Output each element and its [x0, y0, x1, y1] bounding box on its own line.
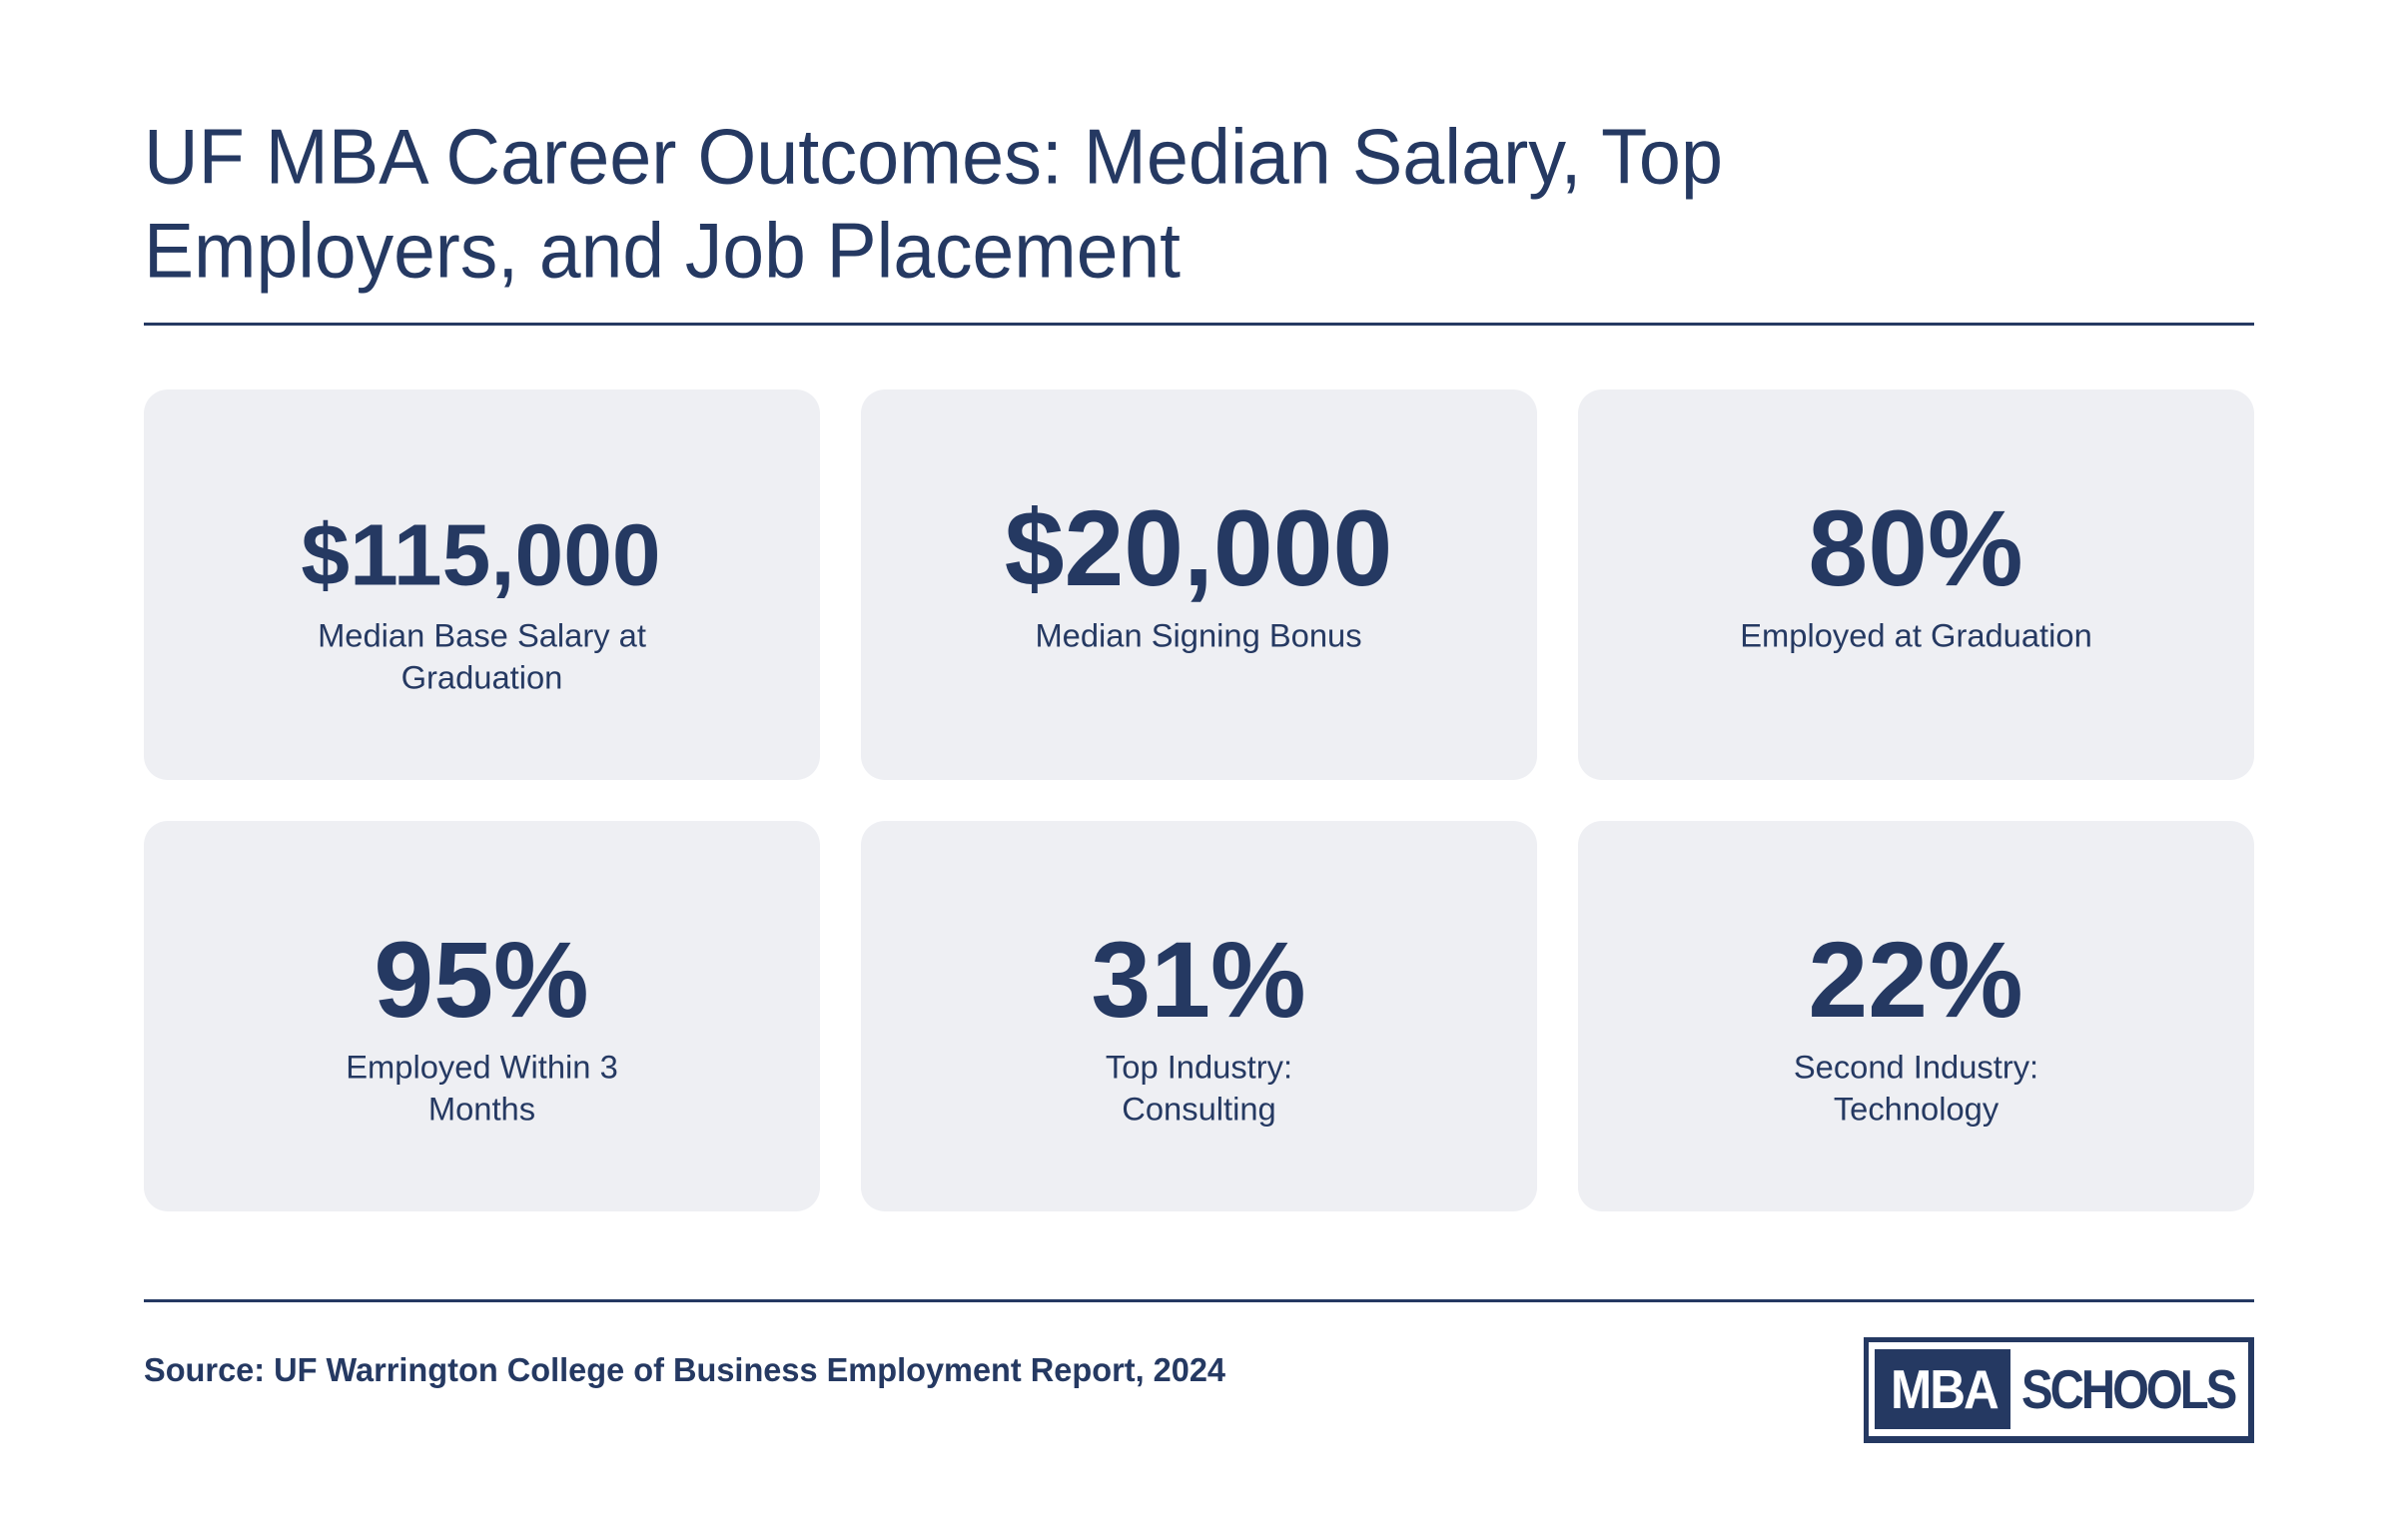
panel: top industry consulting: [861, 821, 1537, 1211]
source note: Source: UF Warrington College of Business Employment Report, 2024: [144, 1351, 1226, 1388]
panel: employed at graduation: Employed at Graduation: [1740, 617, 2092, 653]
logo: MBA Schools: MBA: [1891, 1360, 1998, 1421]
panel: employed within 3 months: Months: [428, 1091, 535, 1127]
panel: median base salary: Median Base Salary at: [318, 617, 646, 653]
panel: second industry technology: Second Industry:: [1794, 1049, 2038, 1085]
title: [144, 112, 1723, 294]
panel: median base salary: Graduation: [401, 659, 562, 695]
panel: top industry consulting: Consulting: [1122, 1091, 1276, 1127]
panel: median signing bonus: [861, 389, 1537, 780]
panel: median signing bonus: $20,000: [1005, 488, 1392, 608]
panel: employed within 3 months: Employed Within 3: [346, 1049, 618, 1085]
title: Employers, and Job Placement: [144, 206, 1181, 294]
panel: median base salary: [144, 389, 820, 780]
panel: employed within 3 months: [144, 821, 820, 1211]
panel: top industry consulting: Top Industry:: [1106, 1049, 1292, 1085]
panel: employed at graduation: 80%: [1808, 488, 2023, 608]
panel: second industry technology: Technology: [1834, 1091, 1999, 1127]
panel: top industry consulting: 31%: [1091, 920, 1306, 1040]
panel: employed at graduation: [1578, 389, 2254, 780]
panel: employed within 3 months: 95%: [374, 920, 589, 1040]
panel: median signing bonus: Median Signing Bonus: [1035, 617, 1362, 653]
title: UF MBA Career Outcomes: Median Salary, Top: [144, 112, 1723, 200]
panel: second industry technology: 22%: [1808, 920, 2023, 1040]
logo: MBA Schools: [1864, 1337, 2254, 1443]
logo: MBA Schools: SCHOOLS: [2021, 1359, 2236, 1420]
panel: second industry technology: [1578, 821, 2254, 1211]
panel: median base salary: $115,000: [301, 505, 661, 603]
